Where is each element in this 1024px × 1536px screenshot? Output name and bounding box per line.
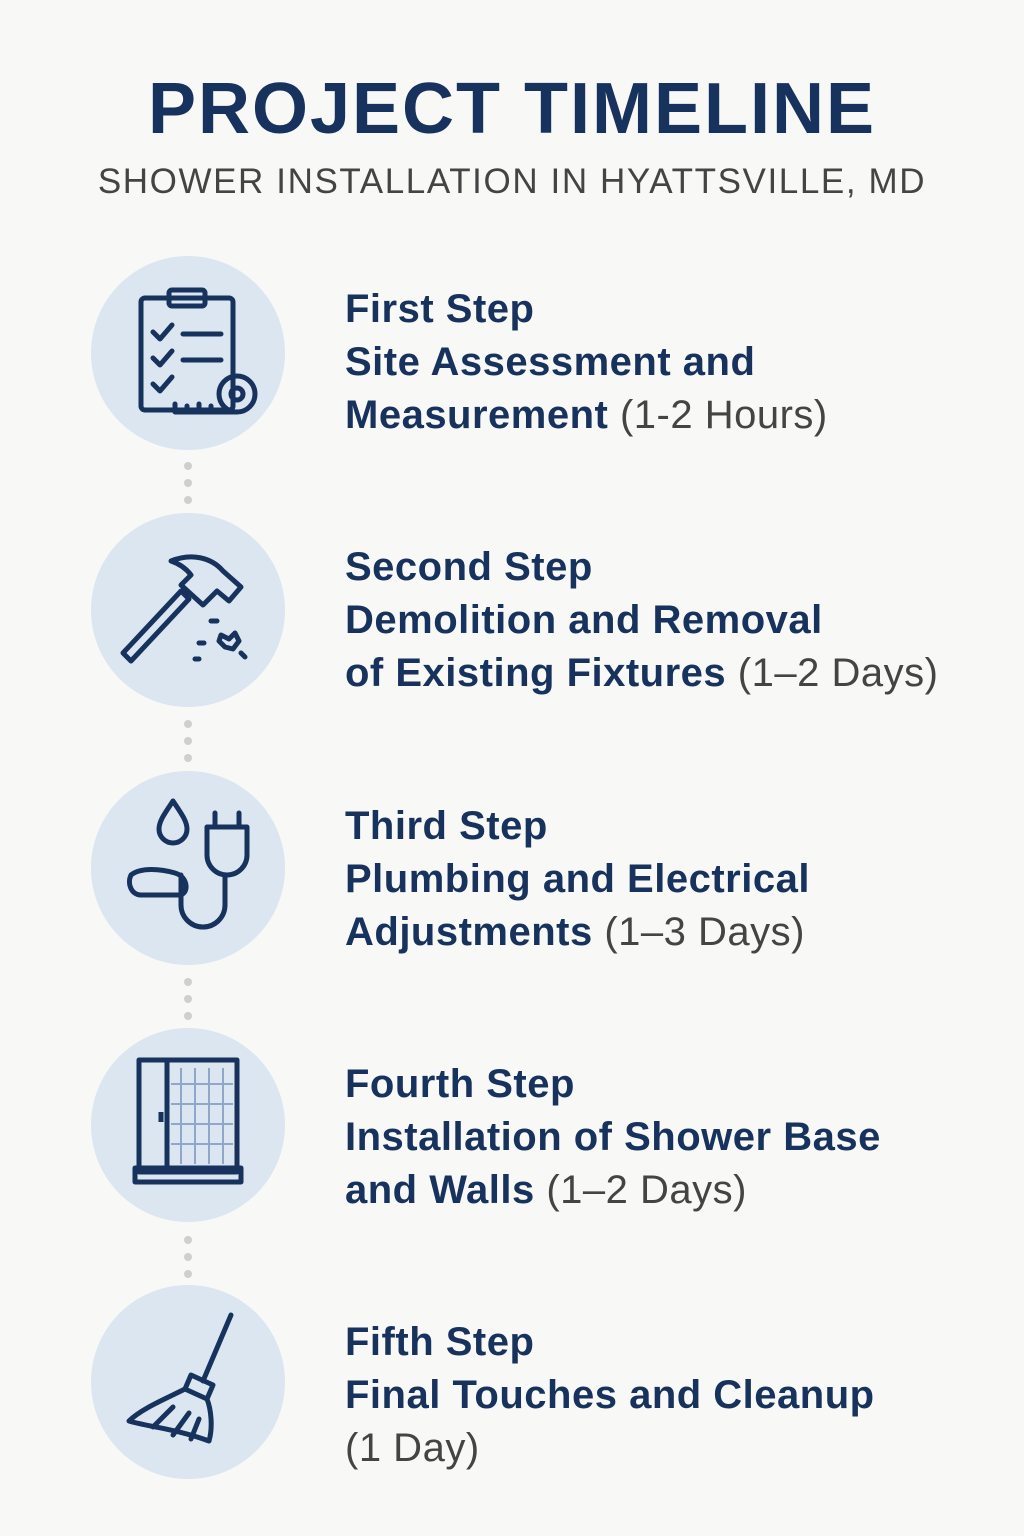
- step 2 text: of Existing Fixtures (1–2 Days): [345, 651, 938, 695]
- step 4 text: Installation of Shower Base: [345, 1115, 881, 1159]
- step 2 text: Demolition and Removal: [345, 598, 823, 642]
- connector dots: [184, 1236, 192, 1278]
- icon: broom: [91, 1285, 285, 1479]
- step 1 text: Measurement (1-2 Hours): [345, 393, 828, 437]
- icon: shower enclosure: [91, 1028, 285, 1222]
- connector dots: [184, 720, 192, 762]
- icon: hammer: [91, 513, 285, 707]
- step 5 text: Final Touches and Cleanup: [345, 1373, 875, 1417]
- step 2 text: Second Step: [345, 545, 593, 589]
- step 4 text: and Walls (1–2 Days): [345, 1168, 747, 1212]
- step 4 text: [345, 1062, 881, 1212]
- connector dots: [184, 978, 192, 1020]
- step 3 text: [345, 804, 810, 954]
- icon: water and plug: [91, 771, 285, 965]
- step 2 text: [345, 545, 938, 695]
- title: PROJECT TIMELINE: [148, 69, 876, 149]
- step 3 text: Adjustments (1–3 Days): [345, 910, 805, 954]
- icon: clipboard: [91, 256, 285, 450]
- step 3 text: Third Step: [345, 804, 548, 848]
- step 1 text: Site Assessment and: [345, 340, 755, 384]
- step 5 text: (1 Day): [345, 1426, 480, 1470]
- step 4 text: Fourth Step: [345, 1062, 575, 1106]
- step 1 text: [345, 287, 828, 437]
- connector dots: [184, 462, 192, 504]
- step 5 text: [345, 1320, 875, 1470]
- step 3 text: Plumbing and Electrical: [345, 857, 810, 901]
- step 1 text: First Step: [345, 287, 534, 331]
- subtitle: SHOWER INSTALLATION IN HYATTSVILLE, MD: [98, 162, 926, 201]
- step 5 text: Fifth Step: [345, 1320, 534, 1364]
